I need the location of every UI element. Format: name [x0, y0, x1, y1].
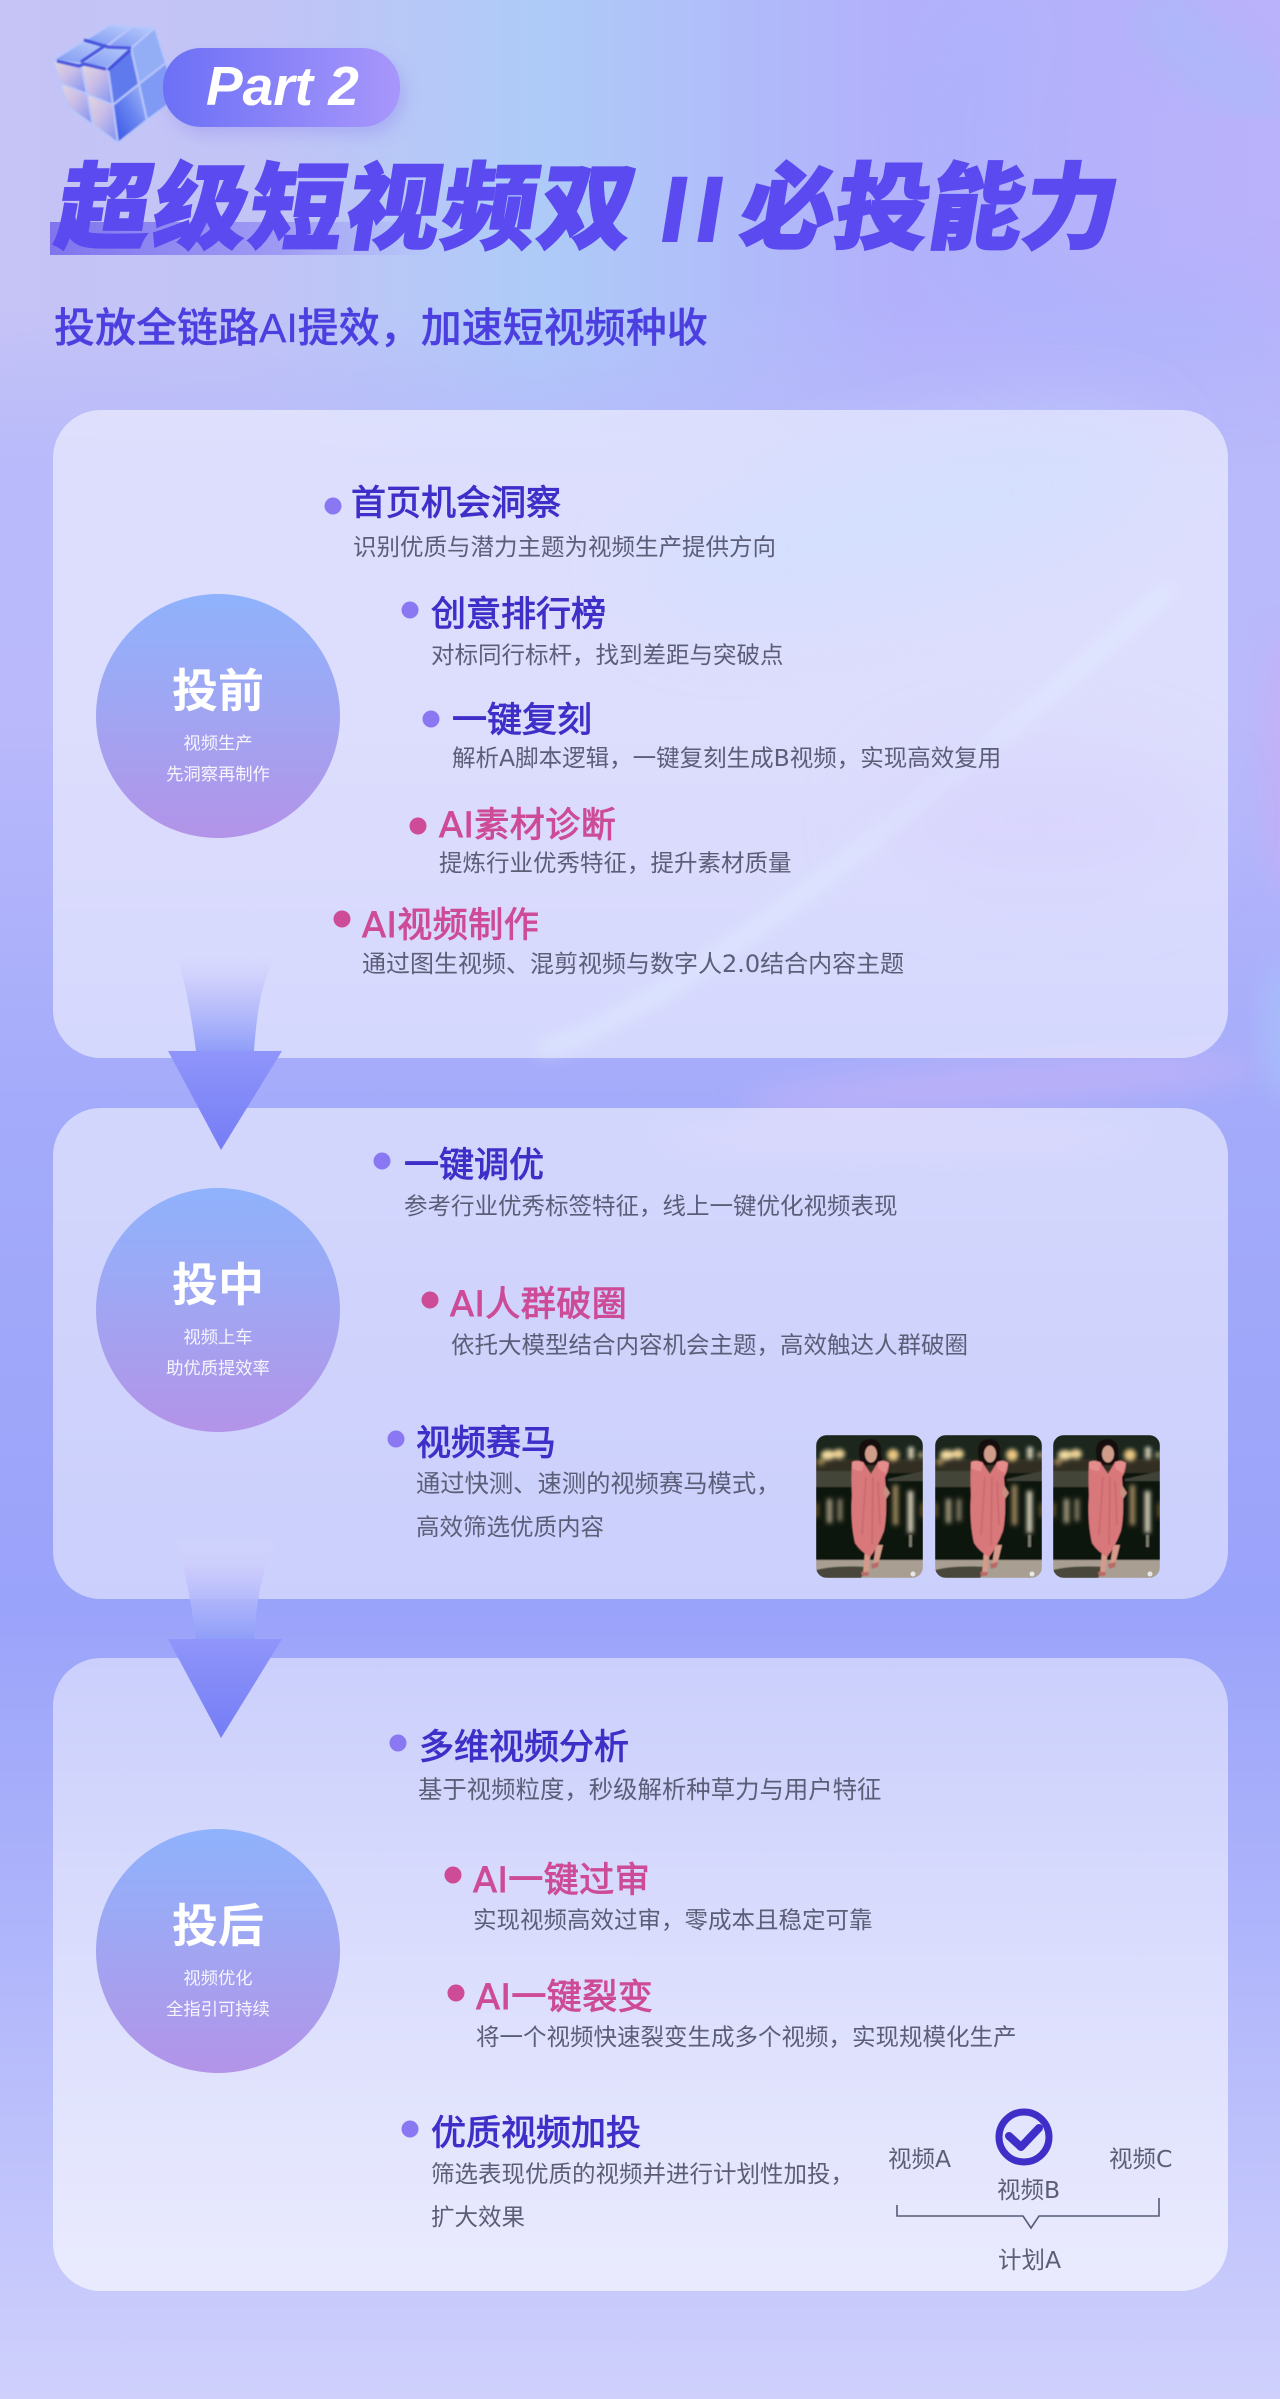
badge: 投前: 视频生产 [183, 733, 253, 753]
item: AI素材诊断: AI素材诊断 [439, 806, 616, 846]
item: 视频赛马: 通过快测、速测的视频赛马模式， [416, 1469, 780, 1498]
panel: before launch [53, 389, 1228, 1058]
title: 必投能力 [733, 133, 1130, 269]
item: 一键复刻: 解析A脚本逻辑，一键复刻生成B视频，实现高效复用 [452, 744, 1001, 772]
image thumbnails: video frames [816, 1435, 1160, 1578]
badge: 投后 [96, 1829, 340, 2073]
item: 优质视频加投: 优质视频加投 [431, 2114, 641, 2154]
diagram: plan A with videos A B C: 视频C [1109, 2145, 1172, 2173]
panel: after launch [53, 1658, 1228, 2291]
item: AI人群破圈 [422, 1285, 968, 1359]
item: AI素材诊断: 提炼行业优秀特征，提升素材质量 [439, 849, 792, 877]
item: 多维视频分析 [390, 1728, 881, 1804]
item: 首页机会洞察: 首页机会洞察 [351, 484, 561, 524]
item: 视频赛马: 视频赛马 [416, 1424, 556, 1464]
item: AI一键裂变 [448, 1978, 1016, 2051]
diagram: plan A with videos A B C [888, 2112, 1172, 2274]
item: 首页机会洞察: 识别优质与潜力主题为视频生产提供方向 [353, 533, 776, 561]
subtitle: 投放全链路AI提效，加速短视频种收 [54, 305, 708, 351]
diagram: plan A with videos A B C: 视频B [997, 2176, 1060, 2204]
icon: glass cube [53, 25, 177, 143]
badge: 投中: 视频上车 [183, 1327, 253, 1347]
item: 多维视频分析: 基于视频粒度，秒级解析种草力与用户特征 [418, 1775, 881, 1804]
icon: check mark [999, 2112, 1049, 2162]
item: AI人群破圈: 依托大模型结合内容机会主题，高效触达人群破圈 [451, 1331, 968, 1359]
item: AI人群破圈: AI人群破圈 [450, 1285, 627, 1325]
panel: during launch [53, 1108, 1228, 1599]
item: 一键调优: 参考行业优秀标签特征，线上一键优化视频表现 [404, 1192, 898, 1220]
title: II [654, 158, 741, 261]
item: 创意排行榜: 对标同行标杆，找到差距与突破点 [431, 641, 784, 669]
item: 优质视频加投: 筛选表现优质的视频并进行计划性加投， [431, 2160, 854, 2188]
title: 超级短视频双 [49, 133, 646, 269]
badge: 投后: 投后 [172, 1900, 264, 1952]
item: AI视频制作 [334, 906, 904, 978]
item: 视频赛马: 高效筛选优质内容 [416, 1513, 604, 1541]
item: AI素材诊断 [410, 806, 792, 877]
arrow: during to after [168, 1535, 282, 1738]
badge: 投中: 助优质提效率 [166, 1358, 270, 1378]
item: 多维视频分析: 多维视频分析 [419, 1728, 629, 1768]
badge: 投前: 投前 [172, 665, 264, 717]
badge: 投后: 视频优化 [183, 1968, 253, 1988]
item: AI一键裂变: AI一键裂变 [476, 1978, 653, 2018]
item: AI一键过审: AI一键过审 [473, 1861, 650, 1901]
pill badge: Part 2: Part 2 [206, 55, 359, 117]
item: 一键复刻 [422, 701, 1001, 772]
diagram: plan A with videos A B C: 计划A [998, 2246, 1061, 2274]
item: 视频赛马 [388, 1424, 780, 1541]
badge: 投后: 全指引可持续 [166, 1999, 270, 2019]
arrow: before to during [168, 947, 282, 1150]
item: AI一键过审: 实现视频高效过审，零成本且稳定可靠 [473, 1906, 872, 1934]
item: 优质视频加投 [402, 2114, 854, 2231]
item: AI视频制作: 通过图生视频、混剪视频与数字人2.0结合内容主题 [362, 950, 904, 978]
item: AI一键裂变: 将一个视频快速裂变生成多个视频，实现规模化生产 [476, 2023, 1016, 2051]
item: 一键调优: 一键调优 [404, 1146, 544, 1186]
badge: 投前: 先洞察再制作 [166, 764, 270, 784]
badge: 投中 [96, 1188, 340, 1432]
diagram: plan A with videos A B C: 视频A [888, 2145, 951, 2173]
pill badge: Part 2 [163, 48, 405, 135]
title [49, 133, 1130, 269]
item: 创意排行榜 [402, 595, 784, 669]
item: AI一键过审 [444, 1861, 872, 1934]
badge: 投中: 投中 [172, 1259, 264, 1311]
item: 一键调优 [374, 1146, 898, 1220]
item: 优质视频加投: 扩大效果 [431, 2203, 525, 2231]
item: AI视频制作: AI视频制作 [362, 906, 539, 946]
item: 首页机会洞察 [324, 484, 776, 561]
badge: 投前 [96, 594, 340, 838]
item: 创意排行榜: 创意排行榜 [431, 595, 606, 635]
item: 一键复刻: 一键复刻 [452, 701, 592, 741]
